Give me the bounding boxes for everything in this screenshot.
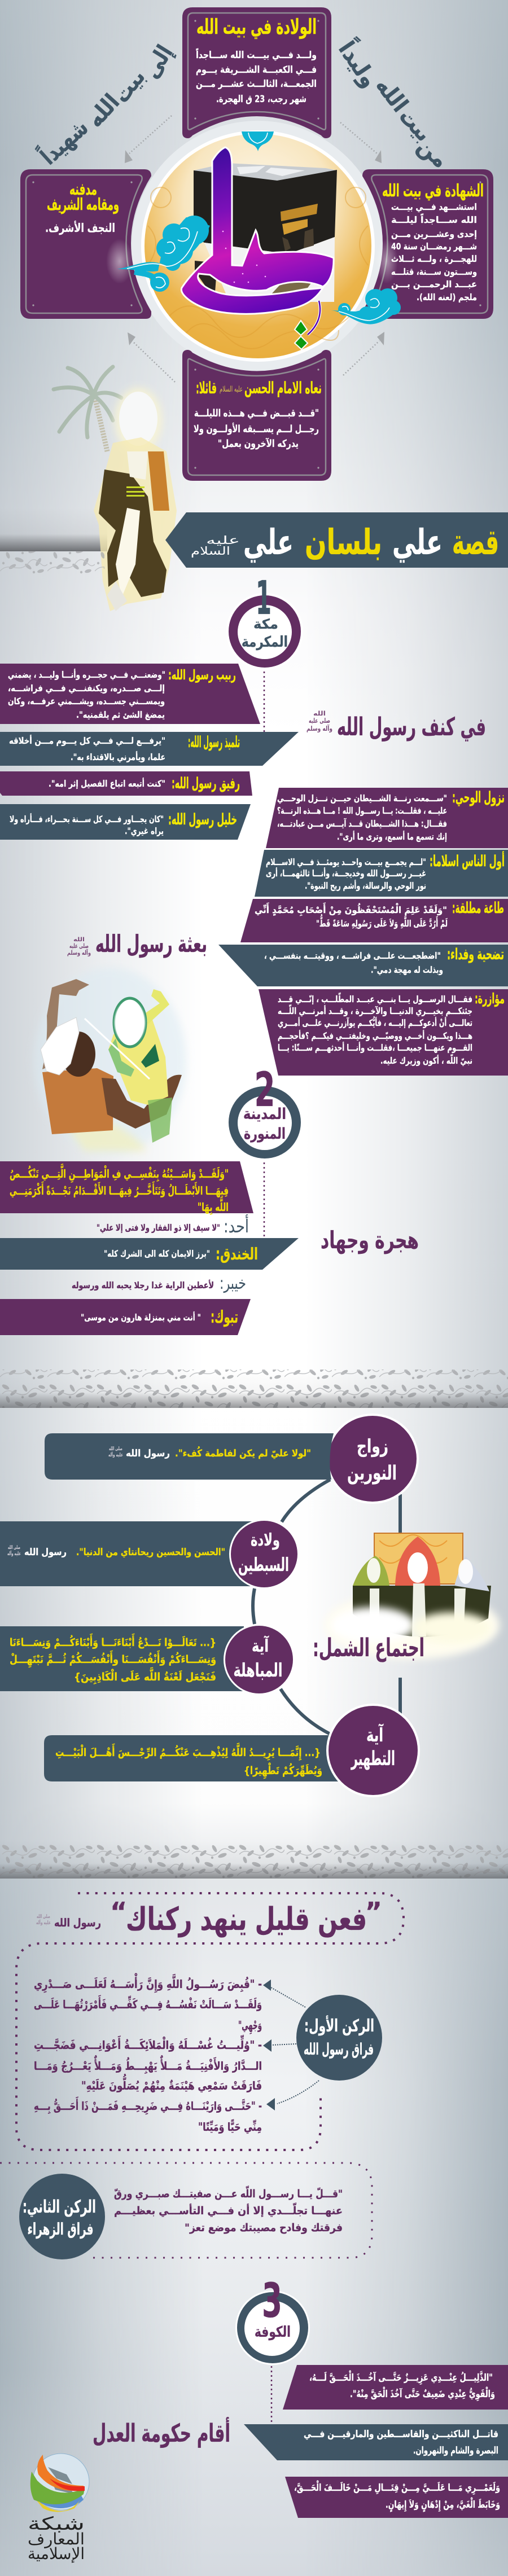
panel: martyrdom in the house of God (362, 169, 493, 319)
circle: marriage of the two lights (326, 1414, 419, 1504)
calligraphy: blessing: صلى الله (109, 1446, 122, 1452)
panel heading (47, 179, 119, 214)
panel text: وســـتون ســـنة، قتلـــه (391, 266, 477, 277)
box: close friend of the Prophet: يراه غيري". (125, 826, 164, 837)
calligraphy: peace be upon him: عليه (206, 533, 240, 547)
logo: Islamic Knowledge Network (28, 2454, 89, 2563)
box: disciple of the Prophet: "يرفـــع لـــي فـــي كل يـــوم مـــن أخلاقه (9, 735, 165, 747)
circle: verse of purification: آية (366, 1723, 383, 1746)
panel heading: قائلا: (196, 379, 217, 397)
box: sacrifice and redemption: "اضطجعـــت علـــى فراشـــه ، ووقيتـــه بنفســـي ، (264, 950, 441, 962)
dotted timeline 2 (264, 1162, 265, 1239)
box: no compromise quote (285, 2477, 508, 2518)
text: Battle of Khaybar: لأعطين الراية غدا رجلا يحبه الله ورسوله (72, 1280, 214, 1291)
circle: second pillar (19, 2174, 105, 2259)
box: quote on battlefields (0, 1161, 253, 1215)
text: second pillar poem: "قـــلّ يـــا رســـول اللّه عـــن صفيتـــك صبـــري ورقّ (114, 2186, 343, 2201)
heading: gathering of the family: اجتماع الشمل: (313, 1634, 424, 1662)
box: Battle of the Trench (0, 1238, 299, 1270)
panel text: ملجم (لعنه الله). (417, 292, 477, 302)
illustration: battle scene (34, 968, 186, 1154)
circle: verse of purification: التطهير (351, 1748, 395, 1770)
quote heading (36, 1897, 382, 1938)
dotted arrow: birth to martyrdom (340, 122, 382, 163)
box: marriage quote: رسول الله (126, 1448, 170, 1459)
box: sacrifice and redemption (218, 945, 508, 986)
calligraphy: blessing: صلى الله (8, 1545, 20, 1551)
curved heading: to the house of God, a martyr: شهيداً (33, 112, 93, 170)
panel heading: الولادة في بيت الله (196, 15, 317, 39)
box: sacrifice and redemption: وبذلت له مهجة دمي". (371, 964, 443, 976)
text: Battle of Uhud (97, 1214, 249, 1237)
box: absolute obedience: "وَلَقَدْ عَلِمَ الْمُسْتَحْفَظُونَ مِنْ أَصْحَابِ مُحَمَّدٍ أَنِّي (255, 902, 447, 916)
panel text: استشـــهد فـــي بيـــت (391, 201, 477, 213)
box: Battle of Tabuk (0, 1299, 251, 1335)
box: absolute obedience (240, 899, 508, 942)
decorative pattern strip: left of figure (0, 551, 104, 577)
box: Battle of the Trench: الخندق: (216, 1244, 258, 1263)
circle: marriage of the two lights: زواج (357, 1435, 388, 1458)
text: Battle of Khaybar (72, 1274, 246, 1293)
box: verse of purification (44, 1735, 341, 1781)
circle: birth of the two grandsons (229, 1519, 299, 1589)
curved heading: from the house of God, a newborn: من (412, 133, 453, 173)
calligraphy: peace be upon him: السلام (191, 544, 230, 558)
panel text: شهر رجب، 23 ق الهجرة. (216, 94, 306, 105)
circle: verse of purification (326, 1704, 420, 1797)
calligraphy: blessing: عليه وآله (108, 1451, 123, 1458)
calligraphy: blessing: عليه وآله (36, 1919, 51, 1926)
heading: migration and jihad: هجرة وجهاد (321, 1226, 419, 1254)
box: quote on battlefields: اللَّه بِهَا" (198, 1197, 229, 1215)
circle: marriage of the two lights: النورين (347, 1462, 397, 1485)
dotted arrow: martyrdom to eulogy (343, 332, 384, 375)
curved heading: from the house of God, a newborn (333, 34, 453, 173)
icon: green diamonds (295, 321, 308, 349)
heading: the Prophet's mission: بعثة رسول الله (95, 930, 207, 958)
calligraphy: blessing (306, 710, 332, 733)
box: verse of mubahala: وَنِسَـــاءَكُمْ وَأَنْفُسَـــنَا وأَنْفُسَـــكُمْ ثُـــمَّ نَبْتَهِـــلْ (10, 1651, 216, 1668)
panel text: ولـــد فـــي بيـــت الله ســـاجداً (196, 47, 317, 61)
panel text: فـــي الكعبـــة الشـــريفة يـــوم (196, 64, 317, 76)
panel heading (196, 379, 322, 397)
panel text: شـــهر رمضـــان سنة 40 (391, 241, 477, 252)
icon: Kaaba (194, 163, 337, 302)
calligraphy: blessing: صلى الله (37, 1914, 50, 1920)
dotted timeline 1 (264, 672, 265, 732)
circle 1: Mecca: 1 (256, 572, 271, 625)
icon: calligraphy swash (181, 147, 334, 335)
logo text: المعارف (28, 2530, 85, 2548)
text: Battle of Khaybar: خيبر: (220, 1274, 246, 1293)
circle: verse of mubahala (224, 1624, 295, 1695)
panel heading: ومقامه الشريف (47, 195, 119, 214)
heading: established the government of justice: أقام حكومة العدل (93, 2417, 230, 2448)
box: foster child of the Prophet: إلـــى صـــدره، ويكنفنـــي فـــي فراشـــه، (8, 683, 165, 694)
box: verse of purification: {... إِنَّمَـــا يُرِيـــدُ اللَّهُ لِيُذْهِـــبَ عَنْكُـــمُ الرِّجْـــسَ أَهْـــلَ الْبَيْـــتِ (55, 1743, 321, 1761)
box: his battles (244, 2424, 508, 2460)
panel text: رجـــل لـــم يســـبقه الأولـــون ولا (194, 423, 319, 435)
title banner: علي (243, 521, 294, 563)
box: foster child of the Prophet: "وضعنـــي فـــي حجـــره وأنـــا وليـــد ، يضمني (8, 669, 165, 681)
text: parting quotes: مِنِّي حَيًّا وَمَيِّتًا" (198, 2119, 262, 2134)
box: close friend of the Prophet (0, 804, 251, 840)
box: companion of the Prophet: رفيق رسول الله: (172, 775, 240, 792)
curved heading: from the house of God, a newborn: وليداً (333, 34, 386, 93)
panel heading: مدفنه (69, 179, 97, 199)
calligraphy: blessing (108, 1446, 123, 1458)
box: disciple of the Prophet (0, 732, 299, 766)
box: marriage quote: "لولا عليّ لم يكن لفاطمة كُفء". (175, 1446, 311, 1459)
text: parting quotes (34, 1973, 262, 2134)
calligraphy: blessing: الله (313, 710, 326, 717)
circle: first pillar (296, 1995, 382, 2081)
illustration: holy family (325, 1533, 500, 1659)
circle 2: Medina (226, 1062, 303, 1161)
box: verse of mubahala: {... تَعَالَـــوْا نَـــدْعُ أَبْنَاءَنَـــا وَأَبْنَاءَكُـــمْ وَنِسَـــاءَنَا (10, 1634, 216, 1649)
dotted arrow: burial to birth (125, 116, 172, 163)
text: parting quotes: - "قُبِضَ رَسُـــولُ اللَّهِ وَإِنَّ رَأْسَـــهُ لَعَلَـــى صَـــدْرِي (34, 1973, 262, 1993)
text: Battle of Uhud: أحد: (224, 1214, 249, 1237)
box: disciple of the Prophet: علما، ويأمرني بالاقتداء به". (71, 751, 165, 763)
panel text (196, 47, 317, 105)
box: Battle of Tabuk: " أنت مني بمنزلة هارون من موسى" (81, 1311, 201, 1323)
circle 1: Mecca (226, 572, 303, 670)
box: descent of revelation: إنك تسمع ما أسمع، وترى ما أرى". (337, 831, 447, 842)
calligraphy: blessing: صلى عليه (69, 942, 89, 950)
box: birth of the two grandsons quote: "الحسن والحسين ريحانتاي من الدنيا". (76, 1547, 225, 1558)
curved heading: to the house of God, a martyr: الله (82, 89, 125, 133)
dotted arrow: eulogy to burial (128, 332, 175, 382)
illustration: palm tree and robed figure (0, 367, 177, 611)
box: companion of the Prophet (0, 771, 252, 796)
box: Battle of Tabuk: تبوك: (211, 1307, 238, 1327)
calligraphy: blessing (36, 1914, 51, 1926)
text: parting quotes: وَلَقَـــدْ سَـــالَتْ نَفْسُـــهُ فِـــي كَفِّـــي فَأَمْرَرْتُهَـــا عَلَـــى (34, 1995, 262, 2012)
text: second pillar poem (114, 2186, 343, 2234)
box: verse of purification: وَيُطَهِّرَكُمْ تَطْهِيرًا} (244, 1762, 322, 1779)
medallion halo (132, 121, 384, 371)
arrows: pillar one to quotes (263, 1980, 319, 2110)
calligraphy: blessing: عليه وآله (7, 1550, 21, 1557)
circle 3: Kufa: الكوفة (255, 2324, 291, 2341)
heading: under the wing of the Prophet (306, 710, 486, 741)
box: close friend of the Prophet: "كان يجـــاور فـــي كل ســـنة بحـــراء، فـــأراه ولا (10, 813, 164, 825)
dotted timeline 3 (271, 2366, 272, 2424)
panel: birth in the house of God (182, 7, 331, 138)
box: first to embrace Islam (255, 850, 508, 897)
circle: verse of mubahala: المباهلة (234, 1659, 282, 1681)
box: quote on battlefields: فِيهَـــا الأَبْطَـــالُ وَتَتَأَخَّـــرُ فِيهَـــا الأَقْـــدَامُ نَجْـــدَةً أَكْرَمَنِـــي (10, 1181, 229, 1198)
calligraphy: blessing: الله (73, 937, 85, 943)
box: disciple of the Prophet: تلميذ رسول الله: (188, 734, 240, 751)
calligraphy: blessing (67, 937, 91, 956)
panel heading: عليه السلام (220, 385, 243, 394)
heading: the Prophet's mission (67, 930, 207, 958)
box: foster child of the Prophet: ربيب رسول الله: (168, 667, 236, 683)
box: companion of the Prophet: "كنت أتبعه اتباع الفصيل إثر امه". (49, 778, 165, 789)
circle: birth of the two grandsons: ولادة (251, 1530, 280, 1550)
circle: verse of mubahala: آية (252, 1635, 269, 1656)
box: descent of revelation (266, 788, 508, 848)
central medallion (117, 130, 401, 362)
quote heading: فعن قليل ينهد ركناك (126, 1901, 367, 1938)
logo text (28, 2513, 85, 2563)
curved heading: from the house of God, a newborn: بيت (394, 103, 437, 147)
curved heading: from the house of God, a newborn: الله (370, 73, 413, 117)
circle 2: Medina: المنورة (244, 1125, 286, 1143)
attribution: رسول الله (54, 1916, 101, 1929)
circle 1: Mecca: مكة (253, 616, 278, 632)
panel text: الجمعـــة، الثالـــث عشـــر مـــن (196, 78, 317, 90)
circle 3: Kufa (235, 2273, 310, 2365)
text: parting quotes: الـــدَّارُ وَالأَفْنِيَـــةُ مَـــلأٌ يَهْبِـــطُ وَمَـــلأٌ يَعْـــرُجُ وَمَـــا (34, 2055, 262, 2074)
box: first to embrace Islam: "لـــم يجمـــع بيـــت واحـــد يومئـــذ فـــي الاســـلام (266, 857, 426, 868)
box: Battle of the Trench: "برز الايمان كله الى الشرك كله" (104, 1248, 210, 1259)
connector lines of the family section (253, 1480, 400, 1734)
box: descent of revelation: "ســـمعت رنـــة الشـــيطان حيـــن نـــزل الوحـــي (277, 793, 447, 804)
quote heading: ” (365, 1897, 382, 1927)
text: parting quotes: - "حَتَّـــى وَارَيْنَـــاهُ فِـــي ضَرِيحِـــهِ فَمَـــنْ ذَا أَحَـــقُّ بِـــهِ (34, 2096, 262, 2114)
box: verse of mubahala (0, 1626, 244, 1691)
box: verse of mubahala: فَنَجْعَل لَعْنَةُ اللَّه عَلَى الْكَاذِبِينَ} (74, 1667, 216, 1684)
panel: eulogy of Imam Hasan (182, 350, 331, 481)
panel text: النجف الأشرف. (45, 220, 115, 235)
calligraphy: blessing (7, 1545, 21, 1557)
circle: first pillar: الركن الأول: (304, 2015, 374, 2036)
panel text: يدركه الآخرون بعمل" (218, 437, 299, 450)
box: foster child of the Prophet (0, 664, 260, 724)
text: parting quotes: - "وُلِّيـــتُ غُسْـــلَهُ وَالْمَلاَئِكَـــةُ أَعْوَانِـــي فَضَجَّـــتِ (34, 2035, 262, 2052)
panel heading: نعاه الامام الحسن (244, 379, 322, 397)
circle 2: Medina: 2 (254, 1062, 275, 1117)
box: marriage quote (45, 1433, 334, 1480)
box: close friend of the Prophet: خليل رسول الله: (168, 811, 237, 828)
box: birth of the two grandsons quote: رسول الله (24, 1547, 67, 1558)
panel text (391, 201, 477, 302)
box: birth of the two grandsons quote (0, 1521, 254, 1586)
circle: first pillar: فراق رسول الله (304, 2040, 374, 2059)
box: foster child of the Prophet: ويمســـني جســـده، ويشـــمني عرفـــه، وكان (8, 696, 165, 707)
panel text: "قـــد قبـــض فـــي هـــذه الليلـــة (194, 407, 319, 419)
decorative pattern band 2 (0, 1370, 508, 1408)
icon: top ornament (242, 131, 274, 151)
box: first to embrace Islam: نور الوحي والرسالة، وأشم ريح النبوة". (305, 880, 426, 892)
calligraphy: blessing: وآله وسلم (306, 724, 332, 733)
dotted frame 1 (16, 1893, 404, 2150)
circle 1: Mecca: المكرمة (242, 634, 288, 651)
curved heading: to the house of God, a martyr: بيت (108, 64, 150, 108)
circle 2: Medina: المدينة (243, 1105, 286, 1123)
text: second pillar poem: فرقتك وفادح مصيبتك موضع تعز" (185, 2222, 343, 2234)
circle: birth of the two grandsons: السبطين (238, 1554, 289, 1576)
logo text: الإسلامية (28, 2544, 85, 2563)
title banner: علي (392, 521, 443, 563)
panel text: للهجـــرة ، ولـــه ثـــلاث (391, 253, 477, 264)
panel text: إحدى وعشـــرين مـــن (391, 229, 477, 239)
circle 3: Kufa: 3 (262, 2273, 282, 2328)
panel text: عبـــد الرحمـــن بـــن (391, 279, 477, 289)
text: second pillar poem: عنهـــا تجلّـــدي إلا أن فـــي التأســـي بعظيـــم (114, 2203, 343, 2218)
icon: right cyan cloud (331, 288, 401, 324)
circle: second pillar: الركن الثاني: (23, 2197, 96, 2217)
box: mutual support: نبيّ اللّه ، أكون وزيرك عليه. (380, 1053, 472, 1067)
calligraphy: peace be upon him (191, 533, 240, 558)
calligraphy: blessing: صلى عليه (309, 717, 330, 725)
icon: globe (30, 2454, 89, 2512)
logo text: شبكة (28, 2513, 85, 2534)
text: parting quotes: فَارَقَتْ سَمْعِي هَيْنَمَةٌ مِنْهُمْ يُصَلُّونَ عَلَيْهِ" (81, 2074, 262, 2093)
icon: left cyan cloud (117, 216, 210, 292)
box: quote on battlefields: "وَلَقَـــدْ وَاسَـــيْتُهُ بِنَفْسِـــي فِ الْمَوَاطِـــنِ الَّتِـــي تَنْكُـــصُ (10, 1164, 229, 1183)
panel: burial place (20, 169, 151, 319)
text: parting quotes: وَجْهِي" (238, 2018, 262, 2034)
box: first to embrace Islam: غيـــر رســـول الله وخديجـــة، وأنـــا ثالثهمـــا، أرى (266, 867, 426, 879)
text: Battle of Uhud: "لا سيف إلا ذو الفقار ولا فتى إلا علي" (97, 1222, 220, 1234)
box: justice quote (283, 2365, 508, 2410)
title banner (165, 512, 508, 568)
curved heading: to the house of God, a martyr (33, 41, 178, 170)
panel text: الله ســـاجداً ليلـــة (391, 213, 477, 225)
decorative pattern band 3 (0, 1841, 508, 1879)
box: absolute obedience: لَمْ أَرُدَّ عَلَى اللَّهِ وَلاَ عَلَى رَسُولِهِ سَاعَةً قَطُّ" (316, 914, 448, 929)
quote heading: “ (110, 1897, 127, 1927)
box: mutual support (259, 989, 508, 1076)
title banner: بلسان (305, 521, 382, 563)
panel text (194, 407, 319, 450)
dotted frame 2 (0, 2163, 372, 2258)
curved heading: to the house of God, a martyr: إلى (138, 41, 178, 83)
circle: second pillar: فراق الزهراء (27, 2219, 94, 2239)
calligraphy: blessing: وآله وسلم (67, 949, 91, 956)
box: foster child of the Prophet: يمضغ الشئ ثم يلقمنيه". (76, 709, 165, 720)
